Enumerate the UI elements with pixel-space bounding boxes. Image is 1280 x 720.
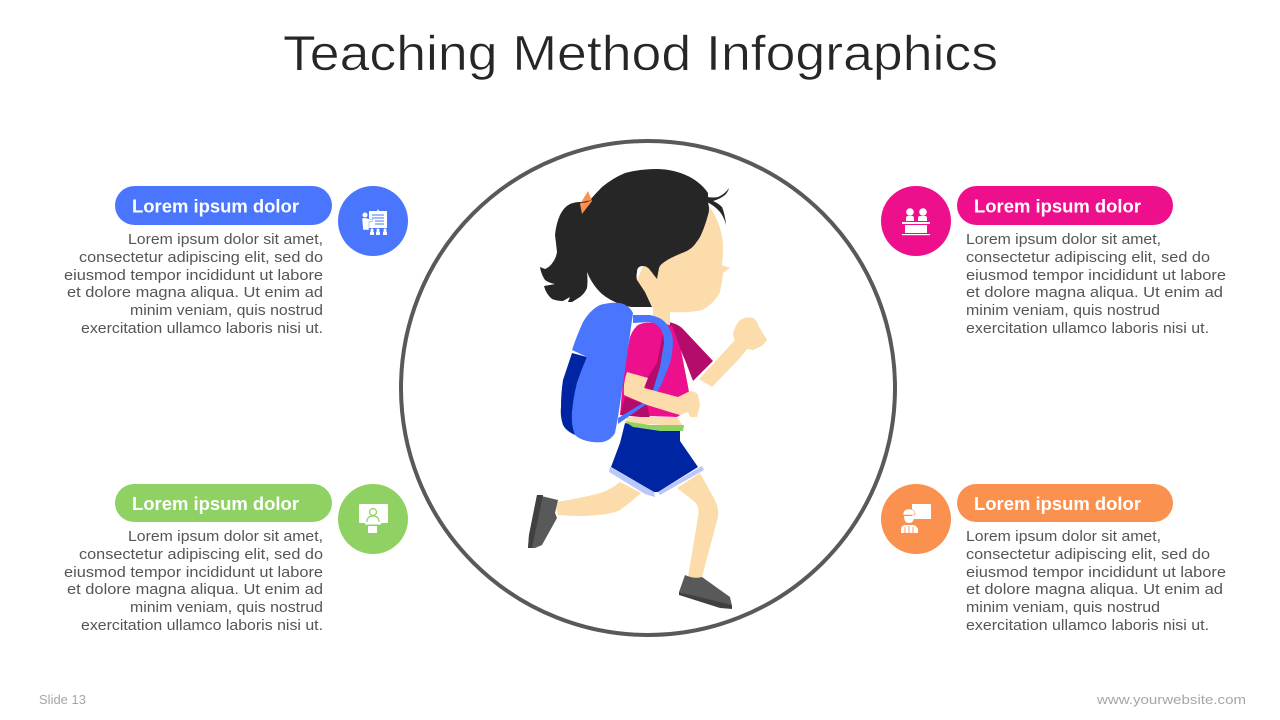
body text: Lorem ipsum dolor sit amet, — [966, 528, 1161, 545]
body text: minim veniam, quis nostrud — [130, 302, 323, 319]
footer: website: www.yourwebsite.com — [1096, 692, 1246, 707]
body text: Lorem ipsum dolor sit amet, — [128, 231, 323, 248]
body text: exercitation ullamco laboris nisi ut. — [966, 617, 1209, 634]
icon: presenter with speech board — [881, 484, 951, 554]
body text: consectetur adipiscing elit, sed do — [79, 249, 323, 266]
body text: Lorem ipsum dolor sit amet, — [128, 528, 323, 545]
panel: bottom right — [881, 484, 1226, 634]
pill heading — [115, 484, 332, 522]
panel: top right — [881, 186, 1226, 337]
panel: bottom left — [64, 484, 408, 634]
pill heading — [957, 186, 1173, 225]
body text: eiusmod tempor incididunt ut labore — [966, 564, 1226, 581]
body text: exercitation ullamco laboris nisi ut. — [81, 617, 323, 634]
pill heading: Lorem ipsum dolor — [974, 493, 1141, 514]
body text: Lorem ipsum dolor sit amet, — [966, 231, 1161, 248]
body text: eiusmod tempor incididunt ut labore — [64, 267, 323, 284]
body text: minim veniam, quis nostrud — [966, 302, 1160, 319]
illustration: running schoolgirl — [528, 169, 767, 609]
body text: minim veniam, quis nostrud — [966, 599, 1160, 616]
body text: exercitation ullamco laboris nisi ut. — [966, 320, 1209, 337]
body text — [64, 231, 323, 337]
pill heading — [115, 186, 332, 225]
icon: teacher at board — [338, 186, 408, 256]
body text: eiusmod tempor incididunt ut labore — [966, 267, 1226, 284]
body text — [966, 231, 1226, 337]
body text: et dolore magna aliqua. Ut enim ad — [67, 581, 323, 598]
footer: slide number: Slide 13 — [39, 692, 86, 707]
body text: minim veniam, quis nostrud — [130, 599, 323, 616]
icon: two people at desk — [881, 186, 951, 256]
body text: et dolore magna aliqua. Ut enim ad — [966, 284, 1223, 301]
body text: et dolore magna aliqua. Ut enim ad — [67, 284, 323, 301]
body text — [966, 528, 1226, 634]
body text: et dolore magna aliqua. Ut enim ad — [966, 581, 1223, 598]
title: Teaching Method Infographics — [283, 27, 998, 81]
body text: exercitation ullamco laboris nisi ut. — [81, 320, 323, 337]
body text: consectetur adipiscing elit, sed do — [966, 546, 1210, 563]
body text — [64, 528, 323, 634]
pill heading — [957, 484, 1173, 522]
pill heading: Lorem ipsum dolor — [132, 493, 299, 514]
pill heading: Lorem ipsum dolor — [974, 196, 1141, 216]
icon: speaker at lectern — [338, 484, 408, 554]
body text: eiusmod tempor incididunt ut labore — [64, 564, 323, 581]
large circle — [401, 141, 895, 635]
body text: consectetur adipiscing elit, sed do — [966, 249, 1210, 266]
body text: consectetur adipiscing elit, sed do — [79, 546, 323, 563]
pill heading: Lorem ipsum dolor — [132, 196, 299, 216]
panel: top left — [64, 186, 408, 337]
